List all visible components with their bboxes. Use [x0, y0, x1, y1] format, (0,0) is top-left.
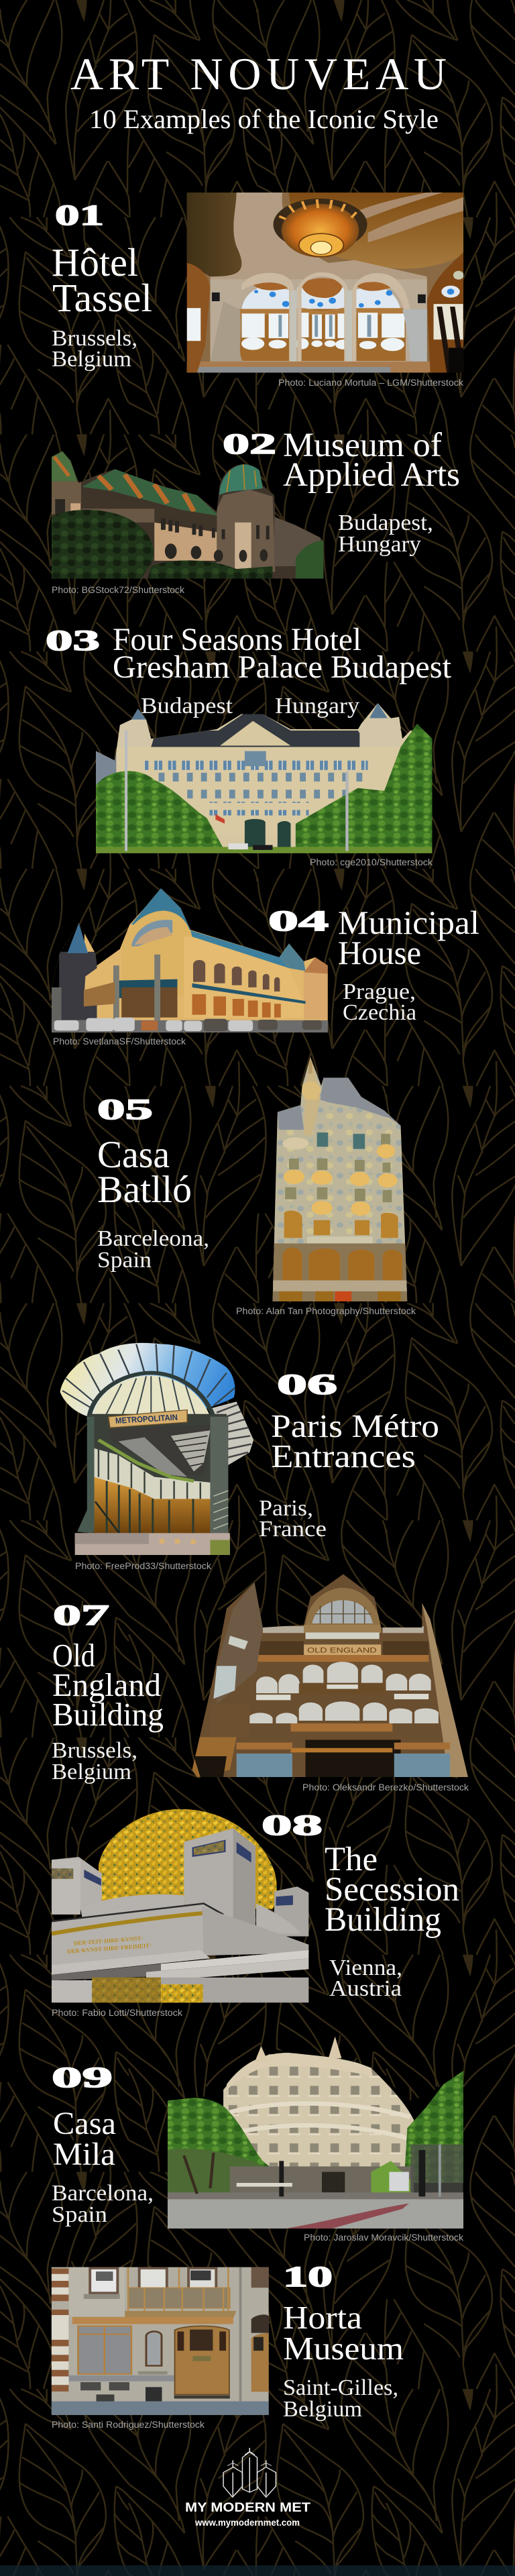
photo credit: Photo: Jaroslav Moravcik/Shutterstock	[304, 2233, 463, 2243]
name: England	[52, 1666, 161, 1703]
location: Czechia	[343, 1000, 416, 1025]
logo: My Modern Met	[185, 2448, 310, 2528]
photo credit: Photo: Santi Rodriguez/Shutterstock	[52, 2420, 205, 2430]
location	[329, 1955, 402, 2001]
location: Barceleona,	[97, 1226, 209, 1251]
name: Tassel	[52, 276, 152, 320]
photo credit: Photo: Fabio Lotti/Shutterstock	[52, 2008, 182, 2018]
name: Hôtel	[52, 240, 138, 284]
number 02: 02	[223, 429, 276, 460]
photo: Horta Museum facade	[52, 2267, 269, 2415]
name: Applied Arts	[283, 456, 460, 494]
location: Hungary	[275, 694, 359, 718]
photo: Casa Mila street	[168, 2037, 463, 2229]
photo credit: Photo: Luciano Mortula – LGM/Shutterstock	[278, 378, 463, 388]
name: The	[325, 1841, 378, 1878]
location	[52, 326, 137, 372]
photo credit: Photo: Oleksandr Berezko/Shutterstock	[302, 1782, 469, 1792]
photo: interior with chandelier	[187, 193, 464, 373]
panel: 07 Old England Building	[52, 1574, 469, 1792]
photo: Old England facade	[192, 1574, 468, 1777]
panel: 02 Museum of Applied Arts	[52, 427, 460, 595]
location: Saint-Gilles,	[283, 2375, 398, 2400]
name: Museum	[283, 2330, 404, 2367]
location	[52, 1738, 137, 1784]
title: ART NOUVEAU	[70, 48, 447, 99]
panel: 09 Casa Mila	[52, 2037, 463, 2243]
number 03: 03	[46, 625, 100, 657]
name: Building	[52, 1696, 164, 1733]
website: www.mymodernmet.com	[194, 2517, 300, 2528]
name: Gresham Palace Budapest	[113, 649, 452, 685]
name: Secession	[325, 1871, 459, 1909]
brand name: MY MODERN MET	[185, 2501, 310, 2515]
number 09: 09	[52, 2062, 113, 2094]
number 06: 06	[277, 1369, 337, 1401]
name: Museum of	[283, 427, 442, 464]
location	[141, 694, 359, 718]
photo: Metropolitain entrance	[60, 1343, 253, 1555]
location: Spain	[52, 2202, 107, 2227]
name: Four Seasons Hotel	[113, 622, 361, 657]
photo: Casa Batllo facade	[273, 1057, 407, 1301]
photo: Secession building: DER·ZEIT·IHRE·KVNST·	[74, 1936, 144, 1947]
location: France	[259, 1517, 327, 1542]
location: Austria	[329, 1976, 402, 2001]
location	[259, 1496, 327, 1542]
name	[52, 1637, 164, 1733]
name: Old	[52, 1637, 95, 1674]
photo credit: Photo: SvetlanaSF/Shutterstock	[53, 1036, 186, 1046]
number 07: 07	[53, 1600, 109, 1631]
location	[283, 2375, 398, 2422]
name	[283, 427, 460, 494]
location	[52, 2181, 154, 2227]
name: Mila	[53, 2137, 115, 2172]
photo: Secession building: DER·KVNST·IHRE·FREIHEIT·	[67, 1943, 152, 1955]
number 10: 10	[283, 2261, 333, 2293]
location: Vienna,	[329, 1955, 402, 1980]
panel: 04 Municipal House	[52, 888, 479, 1046]
location	[97, 1226, 209, 1273]
photo: museum building	[52, 450, 324, 578]
name	[53, 2106, 116, 2172]
photo: municipal house	[52, 888, 328, 1032]
name	[325, 1841, 459, 1939]
name	[283, 2299, 404, 2367]
location	[343, 979, 416, 1025]
photo credit: Photo: Alan Tan Photography/Shutterstock	[236, 1306, 416, 1316]
photo credit: Photo: cge2010/Shutterstock	[310, 857, 433, 867]
location: Paris,	[259, 1496, 313, 1521]
location: Belgium	[52, 347, 131, 372]
panel: 06 Paris Metro Entrances	[60, 1343, 439, 1571]
number 05: 05	[97, 1094, 153, 1126]
number 04: 04	[268, 906, 329, 937]
subtitle: 10 Examples of the Iconic Style	[89, 104, 439, 134]
name: Batlló	[97, 1169, 192, 1211]
location: Brussels,	[52, 326, 137, 351]
icon: three towers	[223, 2448, 276, 2497]
name: House	[338, 934, 421, 971]
location: Hungary	[338, 532, 421, 557]
panel: 01 Hotel Tassel	[52, 193, 464, 388]
photo: Old England facade: OLD ENGLAND	[307, 1647, 377, 1654]
name: Building	[325, 1901, 441, 1939]
location: Brussels,	[52, 1738, 137, 1763]
location: Prague,	[343, 979, 416, 1004]
photo: Metropolitain entrance: METROPOLITAIN	[115, 1413, 178, 1426]
name	[52, 240, 152, 320]
location: Budapest	[141, 694, 233, 718]
location: Belgium	[52, 1760, 131, 1784]
number 01: 01	[55, 200, 104, 231]
panel: 10 Horta Museum	[52, 2261, 404, 2430]
location: Belgium	[283, 2397, 362, 2422]
number 08: 08	[262, 1810, 323, 1841]
panel: 05 Casa Batllo	[97, 1057, 416, 1316]
location: Barcelona,	[52, 2181, 154, 2206]
name: Casa	[97, 1134, 170, 1176]
name: Paris Métro	[271, 1407, 439, 1444]
name: Municipal	[338, 904, 479, 941]
name	[271, 1407, 439, 1474]
name: Casa	[53, 2106, 116, 2141]
photo: Secession building	[52, 1809, 308, 2002]
location	[338, 511, 433, 557]
name	[338, 904, 479, 971]
location: Budapest,	[338, 511, 433, 535]
name: Entrances	[271, 1438, 416, 1474]
photo credit: Photo: FreeProd33/Shutterstock	[75, 1561, 211, 1571]
panel: 08 The Secession Building	[52, 1809, 459, 2018]
photo: palace	[96, 699, 433, 853]
name	[97, 1134, 192, 1211]
name: Horta	[283, 2299, 362, 2336]
photo credit: Photo: BGStock72/Shutterstock	[52, 585, 184, 595]
panel: 03 Four Seasons Hotel Gresham Palace Budapest	[46, 622, 452, 867]
location: Spain	[97, 1248, 152, 1273]
name	[113, 622, 452, 685]
